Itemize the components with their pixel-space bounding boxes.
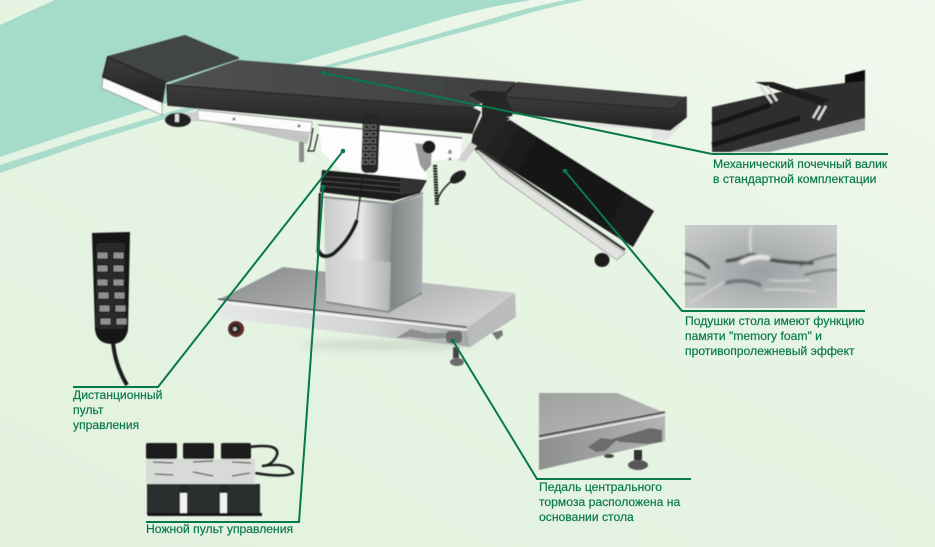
caption: remote control: Дистанционный [73, 388, 162, 402]
operating table [102, 36, 686, 366]
foot and brake pedal [396, 329, 503, 366]
leader dots [321, 71, 567, 343]
inset photo: memory foam [685, 225, 837, 308]
caption: brake pedal: Педаль центрального [539, 480, 662, 494]
base plate [218, 267, 516, 347]
head clamp [165, 111, 198, 127]
leader line: kidney bridge [324, 73, 888, 154]
caption: foot control: Ножной пульт управления [146, 522, 293, 536]
lower leg section [475, 120, 654, 267]
leader line: cushions [565, 171, 865, 311]
caption: brake pedal: основании стола [539, 510, 634, 524]
caption: remote control: управления [73, 418, 139, 432]
side rail [198, 110, 318, 162]
table-mounted remote [361, 115, 380, 173]
main cushion [167, 60, 520, 133]
bellows [320, 170, 427, 201]
background teal band [0, 0, 584, 173]
caption: memory foam: противопролежневый эффект [685, 344, 855, 358]
base shadow [300, 341, 480, 349]
central frame [318, 125, 462, 180]
caption: memory foam: Подушки стола имеют функцию [685, 314, 864, 328]
caption: kidney bridge: Механический почечный валик [713, 157, 887, 171]
head section [102, 36, 238, 115]
leader line: foot control [146, 187, 323, 522]
handheld remote photo [92, 232, 130, 385]
caption: remote control: пульт [73, 403, 104, 417]
upper leg section [505, 82, 686, 140]
caption: kidney bridge: в стандартной комплектации [713, 172, 876, 186]
hinge mechanism [435, 112, 510, 205]
leader line: remote [73, 151, 343, 387]
caption: memory foam: памяти "memory foam" и [685, 329, 822, 343]
coiled cable [318, 175, 363, 256]
caster wheel [228, 321, 244, 337]
caption: brake pedal: тормоза расположена на [539, 495, 680, 509]
foot pedal photo [146, 443, 293, 516]
lifting column [323, 193, 423, 312]
inset photo: kidney bridge [712, 70, 865, 152]
inset photo: brake pedal [539, 393, 665, 470]
leader line: brake pedal [453, 341, 691, 479]
